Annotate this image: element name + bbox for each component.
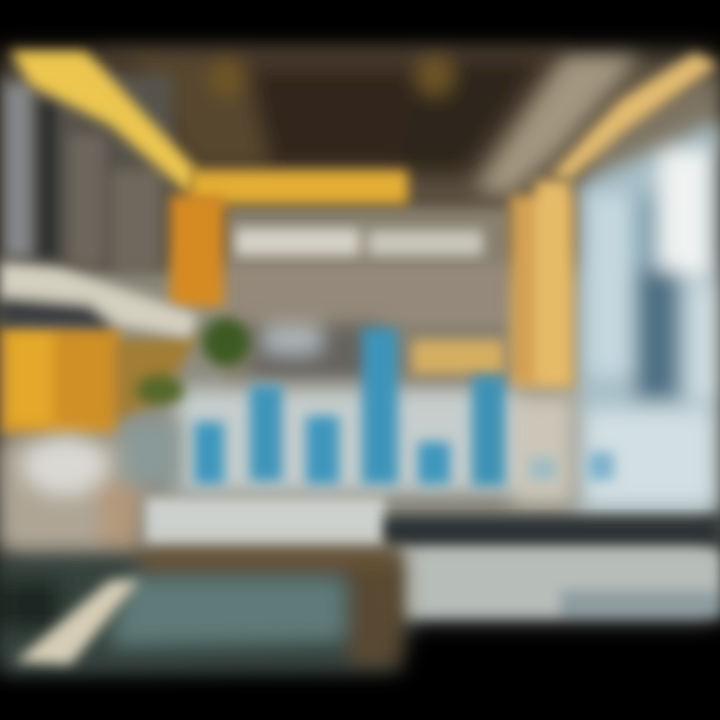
text block: blurred wall title bbox=[235, 228, 483, 256]
panel: right golden column bbox=[510, 180, 574, 390]
panel: glass table bbox=[0, 550, 405, 675]
panel: right grey ceiling band bbox=[475, 55, 640, 195]
panel: white shelf bbox=[0, 262, 198, 338]
panel: right windows bbox=[575, 120, 720, 515]
panel: orange accent behind chart bbox=[412, 340, 504, 374]
panel: yellow centre ceiling beam bbox=[190, 170, 408, 204]
panel: dark counter bbox=[385, 517, 720, 545]
panel: orange column bbox=[170, 195, 224, 307]
panel: ceiling bbox=[90, 48, 570, 178]
panel: right ceiling beam bbox=[550, 52, 718, 180]
panel: right outer wall bbox=[590, 70, 720, 200]
panel: sofa bbox=[0, 420, 180, 550]
icon: plants bbox=[136, 318, 250, 405]
panel: left orange wall bbox=[0, 325, 200, 435]
panel: white counter bbox=[145, 497, 385, 547]
panel: table highlight bbox=[15, 580, 140, 665]
panel: yellow left ceiling beam bbox=[10, 50, 195, 195]
panel: light counter front bbox=[400, 550, 720, 618]
bar chart bbox=[194, 328, 614, 486]
panel: back wall bbox=[225, 208, 510, 393]
panel: left window wall bbox=[0, 75, 172, 270]
panel: chart backdrop bbox=[175, 325, 574, 505]
